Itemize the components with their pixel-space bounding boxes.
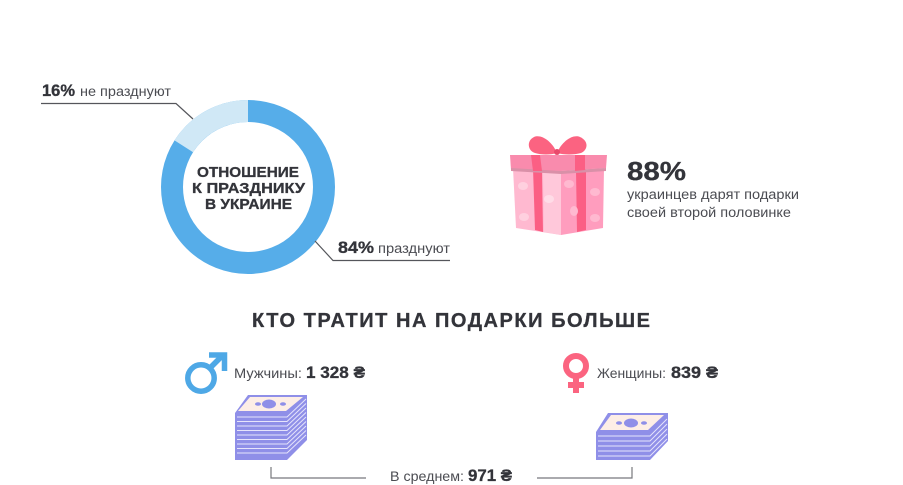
callout: 16% do not celebrate: не празднуют (80, 84, 171, 99)
donut title: ОТНОШЕНИЕ (197, 165, 299, 181)
donut title (192, 165, 306, 213)
heading: КТО ТРАТИТ НА ПОДАРКИ БОЛЬШЕ (252, 310, 650, 332)
label: women: 839 ₴ (671, 364, 718, 382)
label: men: 1 328 ₴ (306, 364, 365, 382)
label: men (234, 364, 365, 382)
stat: 88% gifts (627, 156, 799, 220)
callout: 84% celebrate (315, 239, 450, 260)
label: women (597, 364, 718, 382)
icon: money stack men (235, 395, 307, 460)
icon: female symbol (566, 356, 586, 393)
label: men: Мужчины: (234, 366, 302, 381)
label: women: Женщины: (597, 366, 666, 381)
stat: 88% gifts: украинцев дарят подарки (627, 187, 799, 202)
average label: 971 ₴ (468, 467, 512, 485)
average label: В среднем: (390, 469, 464, 484)
donut chart (172, 111, 324, 263)
stat: 88% gifts: своей второй половинке (627, 205, 791, 220)
icon: male symbol (188, 355, 224, 391)
icon: gift box (510, 136, 607, 235)
icon: money stack women (596, 413, 668, 460)
callout: 16% do not celebrate: 16% (42, 82, 75, 100)
stat: 88% gifts: 88% (627, 156, 686, 186)
average bracket (271, 467, 632, 485)
callout: 16% do not celebrate (41, 82, 193, 119)
average label (390, 467, 512, 485)
donut title: К ПРАЗДНИКУ (192, 181, 306, 197)
callout: 84% celebrate: 84% (338, 239, 374, 257)
donut title: В УКРАИНЕ (205, 197, 292, 213)
callout: 84% celebrate: празднуют (378, 241, 450, 256)
